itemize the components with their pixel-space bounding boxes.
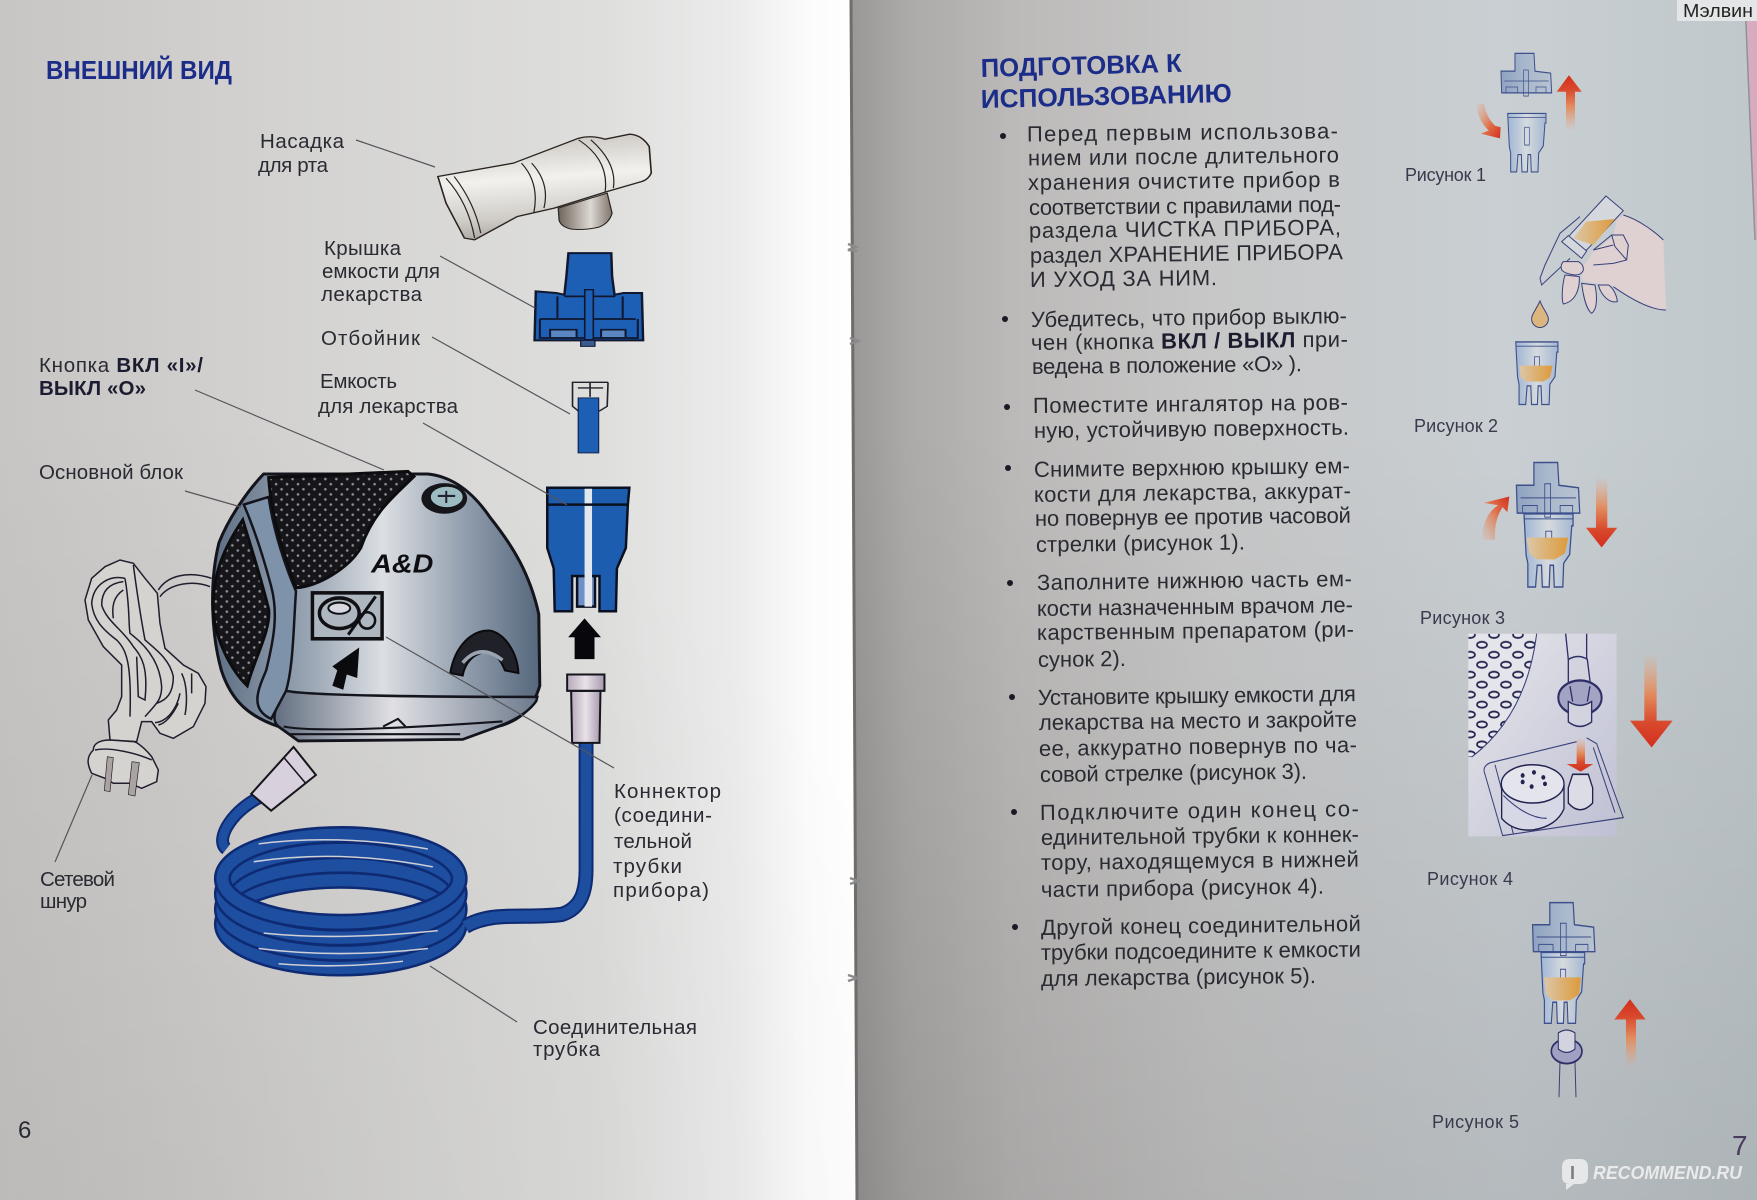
step 2 text: ведена в положение «О» ).: [1032, 351, 1302, 379]
step 8 text: Другой конец соединительной: [1041, 911, 1361, 940]
tube nozzle: [1559, 1062, 1576, 1097]
label: mouthpiece: Насадка: [260, 130, 345, 153]
figure 4 illustration: [1468, 634, 1673, 836]
step 4 text: стрелки (рисунок 1).: [1036, 529, 1245, 557]
step 7 text: [1040, 796, 1359, 902]
label: on off button: [39, 354, 203, 400]
step 7 text: Подключите один конец со-: [1040, 796, 1359, 825]
page number 6: 6: [18, 1117, 31, 1144]
brand logo: A&D: [370, 550, 433, 579]
power button: [421, 483, 467, 514]
step 3 text: ную, устойчивую поверхность.: [1034, 415, 1349, 443]
label: mouthpiece: [258, 130, 345, 177]
label: connecting tube: Соединительная: [533, 1016, 697, 1039]
label: on off button: ВЫКЛ «О»: [39, 377, 146, 400]
drop: [1532, 301, 1548, 327]
figure 2 caption: Рисунок 2: [1414, 416, 1498, 436]
label: power cord: шнур: [40, 890, 87, 913]
step 6 text: совой стрелке (рисунок 3).: [1040, 759, 1307, 787]
big arrow: [1630, 652, 1673, 747]
step 7 text: части прибора (рисунок 4).: [1041, 874, 1324, 902]
label: connector: Коннектор: [614, 780, 721, 803]
figure 3 caption: Рисунок 3: [1420, 608, 1505, 628]
label: mouthpiece: для рта: [258, 154, 329, 177]
arrow down: [1586, 476, 1617, 547]
figure 5 caption: Рисунок 5: [1432, 1112, 1519, 1132]
label: connector: трубки: [613, 855, 682, 878]
label: medicine container cap: [321, 237, 440, 306]
label: connector: [613, 780, 721, 902]
step 4 text: кости для лекарства, аккурат-: [1034, 478, 1351, 507]
step 8 text: [1041, 911, 1361, 991]
figure 4 caption: Рисунок 4: [1427, 869, 1513, 889]
step 4 text: но повернув ее против часовой: [1035, 503, 1351, 531]
right page: preparation for use: [980, 48, 1748, 1161]
coiled blue tube: [222, 743, 586, 968]
step 1 text: раздела ЧИСТКА ПРИБОРА,: [1029, 215, 1341, 243]
step 7 text: единительной трубки к коннек-: [1041, 822, 1359, 850]
label: medicine container: [318, 370, 459, 418]
connector port symbol: [312, 593, 382, 639]
heading: preparation for use: [980, 48, 1232, 114]
step 1 text: [1027, 118, 1343, 292]
tube end connector, lower: [251, 747, 316, 811]
heading: external view: ВНЕШНИЙ ВИД: [46, 55, 232, 85]
step 5 text: Заполните нижнюю часть ем-: [1037, 566, 1352, 595]
arrow up: [1614, 999, 1646, 1068]
figure 1 caption: Рисунок 1: [1405, 165, 1486, 185]
unit body: [213, 474, 540, 741]
tray: [1484, 738, 1623, 836]
blue medicine container: [547, 488, 629, 611]
dropper bottle: [1568, 196, 1623, 252]
label: connector: прибора): [613, 879, 709, 902]
step 1 text: нием или после длительного: [1028, 142, 1339, 170]
label: connector: (соедини-: [614, 804, 712, 827]
arrow up to container: [568, 618, 601, 659]
label: power cord: [40, 868, 115, 913]
watermark: [1562, 1159, 1743, 1190]
arrow to port: [332, 647, 359, 690]
label: medicine container cap: лекарства: [321, 283, 423, 306]
tube to vertical connector: [465, 743, 586, 927]
step 6 text: ее, аккуратно повернув по ча-: [1039, 732, 1357, 761]
curved arrow: [1482, 496, 1509, 540]
step 4 text: [1034, 453, 1351, 557]
step 8 text: трубки подсоедините к емкости: [1041, 937, 1361, 965]
step 1 text: соответствии с правилами под-: [1029, 192, 1341, 220]
figure 3 illustration: [1482, 463, 1617, 587]
label: main unit: Основной блок: [39, 461, 184, 484]
step 5 text: карственным препаратом (ри-: [1037, 617, 1354, 645]
step 6 text: Установите крышку емкости для: [1038, 681, 1356, 710]
label: medicine container: Емкость: [320, 370, 397, 393]
bullet list markers: [1000, 133, 1018, 930]
label: baffle: Отбойник: [321, 327, 421, 350]
illustration: blue container cap: [535, 253, 643, 346]
step 5 text: [1037, 566, 1354, 672]
label: connecting tube: трубка: [533, 1038, 601, 1061]
step 1 text: И УХОД ЗА НИМ.: [1030, 265, 1217, 292]
step 2 text: чен (кнопка ВКЛ / ВЫКЛ при-: [1031, 327, 1348, 355]
tube and nut: [1566, 634, 1587, 659]
heading: preparation for use: ИСПОЛЬЗОВАНИЮ: [980, 78, 1232, 114]
top speaker grille: [269, 471, 414, 588]
step 1 text: хранения очистите прибор в: [1028, 167, 1340, 195]
step 3 text: [1033, 390, 1349, 443]
handle: [450, 631, 518, 676]
label: on off button: Кнопка ВКЛ «I»/: [39, 354, 203, 377]
left page: external view: [18, 55, 721, 1144]
hand: [1582, 215, 1666, 310]
illustration: mouthpiece: [438, 134, 651, 240]
step 3 text: Поместите ингалятор на ров-: [1033, 390, 1348, 418]
step 2 text: Убедитесь, что прибор выклю-: [1031, 303, 1347, 332]
step 4 text: Снимите верхнюю крышку ем-: [1034, 453, 1350, 482]
left grille: [213, 520, 269, 686]
page number 7: 7: [1732, 1130, 1748, 1161]
figure 5 illustration: [1533, 903, 1646, 1097]
step 5 text: кости назначенным врачом ле-: [1037, 592, 1353, 621]
port: [1568, 774, 1593, 810]
username tag: Мэлвин: [1683, 1, 1753, 21]
label: connecting tube: [533, 1016, 697, 1061]
step 5 text: сунок 2).: [1038, 646, 1126, 672]
step 8 text: для лекарства (рисунок 5).: [1041, 963, 1316, 991]
figure 2: hand with dropper bottle: [1532, 196, 1666, 327]
fingers: [1562, 275, 1617, 313]
illustration: power cord and plug: [85, 560, 212, 796]
step 1 text: раздел ХРАНЕНИЕ ПРИБОРА: [1030, 239, 1343, 268]
filter cylinder: [1502, 784, 1564, 830]
watermark: RECOMMEND.RU: [1593, 1163, 1743, 1183]
watermark: I: [1570, 1163, 1575, 1183]
small arrow: [1567, 738, 1593, 772]
tube to mouth connector: [223, 795, 264, 849]
leader lines: [55, 140, 614, 1022]
illustration: main compressor unit with tube: [213, 471, 629, 968]
label: connector: тельной: [614, 830, 692, 853]
label: medicine container cap: емкости для: [322, 260, 440, 283]
curved arrow: [1476, 104, 1501, 138]
step 1 text: Перед первым использова-: [1027, 118, 1338, 146]
label: medicine container: для лекарства: [318, 395, 459, 418]
arrow up: [1557, 75, 1582, 131]
figure 1 illustration: [1476, 53, 1582, 172]
label: medicine container cap: Крышка: [324, 237, 402, 260]
step 2 text: [1031, 303, 1348, 379]
heading: preparation for use: ПОДГОТОВКА К: [980, 48, 1182, 83]
step 6 text: лекарства на место и закройте: [1039, 707, 1357, 735]
illustration: baffle: [572, 382, 608, 453]
figure 2 container with liquid: [1516, 342, 1558, 405]
step 7 text: тору, находящемуся в нижней: [1041, 847, 1359, 875]
tube end connector, upper: [567, 674, 604, 743]
label: power cord: Сетевой: [40, 868, 115, 891]
step 6 text: [1038, 681, 1357, 787]
